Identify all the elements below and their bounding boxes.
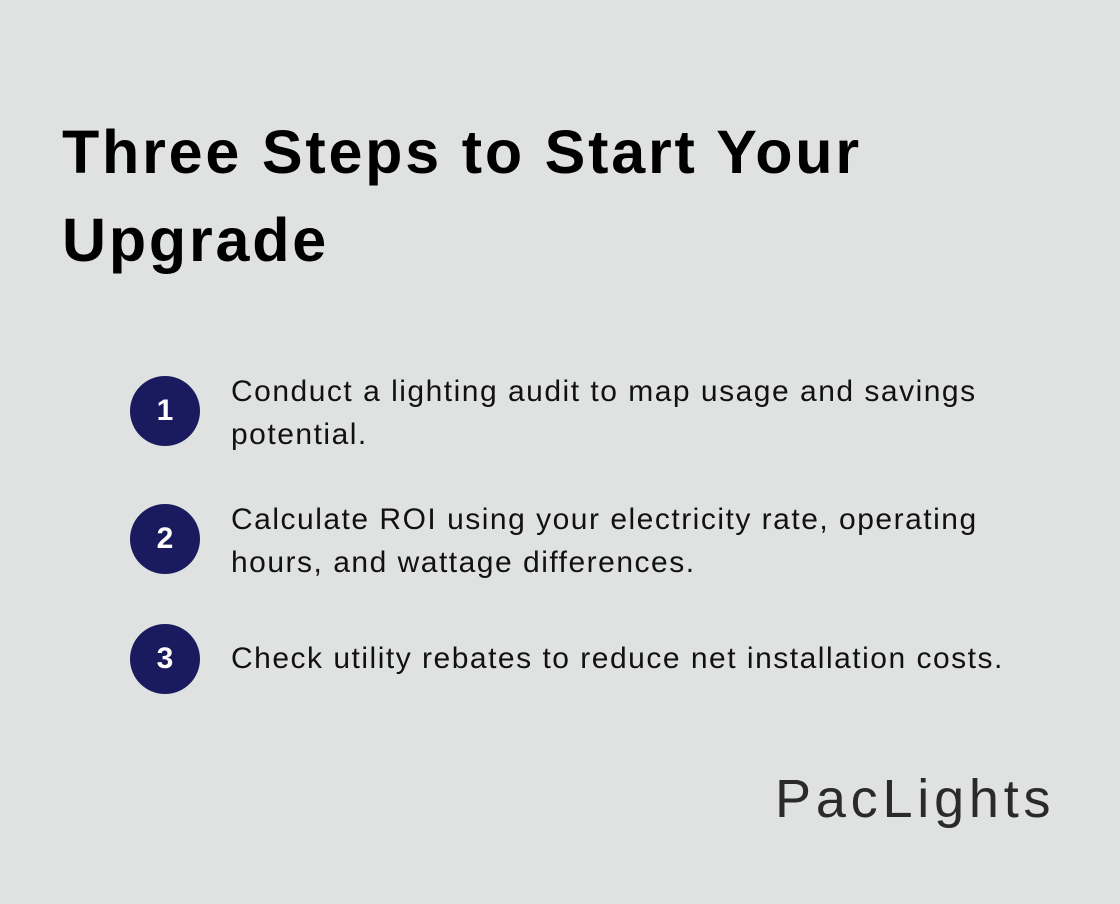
icon: number 2: 2 bbox=[157, 522, 173, 555]
step 2 text: hours, and wattage differences. bbox=[231, 546, 696, 579]
step 1 bbox=[130, 375, 977, 451]
icon: number 1: 1 bbox=[157, 394, 173, 427]
title: Three Steps to Start Your bbox=[62, 118, 862, 186]
step 2 text bbox=[231, 503, 978, 579]
icon: number 1 bbox=[130, 376, 200, 446]
step 1 text: Conduct a lighting audit to map usage and savings bbox=[231, 375, 977, 408]
title: Upgrade bbox=[62, 206, 329, 274]
step 3 text: Check utility rebates to reduce net installation costs. bbox=[231, 642, 1004, 675]
step 2 bbox=[130, 503, 978, 579]
logo: PacLights bbox=[775, 769, 1055, 829]
step 2 text: Calculate ROI using your electricity rate, operating bbox=[231, 503, 978, 536]
icon: number 3 bbox=[130, 624, 200, 694]
step 1 text bbox=[231, 375, 977, 451]
title bbox=[62, 118, 862, 274]
icon: number 3: 3 bbox=[157, 642, 173, 675]
step 3 bbox=[130, 624, 1004, 694]
icon: number 2 bbox=[130, 504, 200, 574]
step 1 text: potential. bbox=[231, 418, 368, 451]
